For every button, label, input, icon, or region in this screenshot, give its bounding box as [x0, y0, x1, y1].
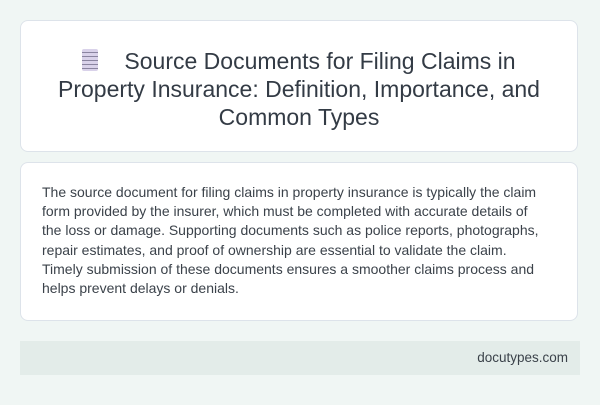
text block: form provided by the insurer, which must be completed with accurate details of: [42, 203, 528, 219]
panel: description: [20, 162, 578, 321]
heading: Property Insurance: Definition, Importance, and: [58, 76, 540, 102]
heading: [58, 48, 540, 130]
text block: the loss or damage. Supporting documents such as police reports, photographs,: [42, 222, 539, 238]
footer: docutypes.com: [477, 350, 568, 365]
text block: helps prevent delays or denials.: [42, 280, 239, 296]
heading: Source Documents for Filing Claims in: [124, 48, 516, 74]
text block: repair estimates, and proof of ownership are essential to validate the claim.: [42, 242, 507, 258]
panel: title: [20, 20, 578, 152]
text block: The source document for filing claims in property insurance is typically the claim: [42, 184, 536, 200]
text block: Timely submission of these documents ensures a smoother claims process and: [42, 261, 534, 277]
footer: [20, 341, 580, 375]
text block: [42, 184, 539, 296]
icon: document: [82, 49, 98, 71]
heading: Common Types: [219, 104, 379, 130]
